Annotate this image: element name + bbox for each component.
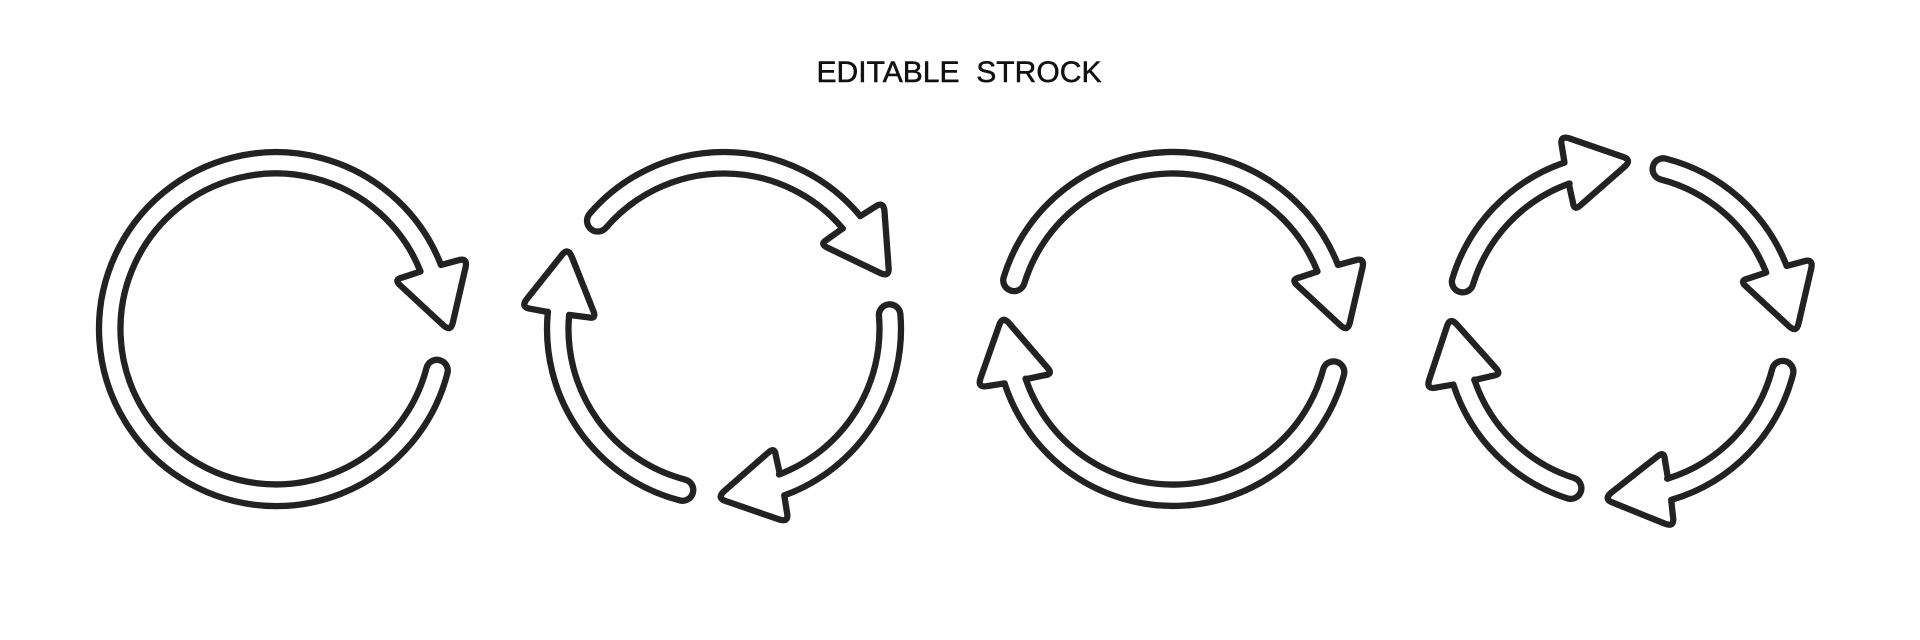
arrow: bottom: [973, 318, 1346, 515]
arrow: top right: [1653, 158, 1812, 329]
icon: three circular arrows: [473, 101, 904, 523]
arrow: bottom left: [1422, 319, 1590, 499]
arrow: top: [577, 101, 904, 359]
icon: two circular arrows: [973, 152, 1363, 515]
icon: single circular arrow: [99, 152, 466, 506]
arrow: top: [1003, 152, 1363, 328]
title: EDITABLE STROCK: [816, 56, 1102, 89]
icon: four circular arrows: [1422, 133, 1812, 534]
arrow: lower right: [719, 301, 901, 523]
arrow: left: [473, 243, 765, 508]
arrow: top left: [1452, 133, 1630, 298]
arrow: bottom right: [1605, 347, 1794, 534]
